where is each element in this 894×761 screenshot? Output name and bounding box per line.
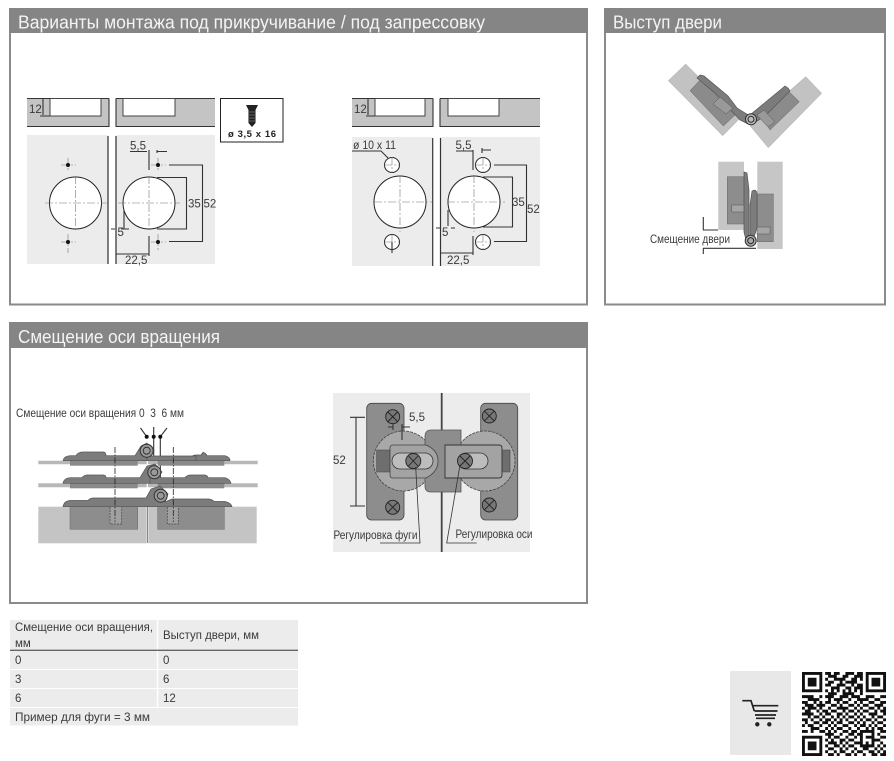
table: axis offset vs door protrusion: 0 xyxy=(163,655,169,667)
middle hinge position xyxy=(38,464,258,488)
diagram: screw-on variant: 12 xyxy=(29,104,42,116)
icon: screw size box xyxy=(220,98,283,142)
table: axis offset vs door protrusion: 12 xyxy=(163,693,176,705)
table: axis offset vs door protrusion: 3 xyxy=(15,674,21,686)
diagram: press-in variant: 52 xyxy=(527,204,540,216)
table: axis offset vs door protrusion: 6 xyxy=(15,693,21,705)
heading: mounting variants xyxy=(9,8,588,33)
diagram: hinge closed: Смещение двери xyxy=(650,234,730,246)
table: axis offset vs door protrusion: мм xyxy=(15,638,31,650)
diagram: screw-on variant: 5 xyxy=(118,227,124,239)
diagram: press-in variant: 5 xyxy=(442,227,448,239)
QR code xyxy=(802,672,886,756)
diagram: press-in variant: 5,5 xyxy=(456,140,472,152)
table: axis offset vs door protrusion: Смещение оси вращения, xyxy=(15,622,153,634)
diagram: hinge top view xyxy=(333,393,532,552)
diagram: screw-on variant: 52 xyxy=(204,198,216,210)
diagram: hinge top view: Регулировка фуги xyxy=(334,530,418,542)
heading: mounting variants: Варианты монтажа под прикручивание / под запрессовку xyxy=(18,12,485,32)
diagram: press-in variant: 35 xyxy=(512,197,525,209)
diagram: press-in variant: 12 xyxy=(354,104,367,116)
table: axis offset vs door protrusion: 6 xyxy=(163,674,169,686)
icon: shopping cart xyxy=(730,671,791,755)
diagram: hinge top view: Регулировка оси xyxy=(456,529,532,541)
heading: door protrusion: Выступ двери xyxy=(613,12,722,32)
diagram: screw-on variant: 22,5 xyxy=(125,255,147,267)
diagram: screw-on variant xyxy=(27,98,216,267)
icon: screw group xyxy=(386,409,496,514)
bottom hinge position with doors xyxy=(38,486,257,543)
diagram: hinge open xyxy=(668,64,822,148)
table: axis offset vs door protrusion xyxy=(10,620,298,726)
diagram: press-in variant xyxy=(352,98,540,267)
panel: door protrusion xyxy=(604,8,886,304)
panel: mounting variants xyxy=(9,8,588,304)
heading: axis offset xyxy=(9,322,588,348)
diagram: press-in variant: ø 10 x 11 xyxy=(353,140,396,152)
table: axis offset vs door protrusion: Выступ двери, мм xyxy=(163,630,259,642)
diagram: axis offset positions: Смещение оси вращения 0 3 6 мм xyxy=(16,408,184,420)
diagram: hinge top view: 5,5 xyxy=(409,412,425,424)
diagram: hinge top view: 52 xyxy=(333,455,346,467)
icon: screw size box: ø 3,5 x 16 xyxy=(228,129,276,140)
heading: door protrusion xyxy=(604,8,886,33)
diagram: screw-on variant: 5,5 xyxy=(130,140,146,152)
diagram: hinge closed xyxy=(650,162,783,254)
diagram: press-in variant: 22,5 xyxy=(447,255,469,267)
heading: axis offset: Смещение оси вращения xyxy=(18,327,220,347)
diagram: screw-on variant: 35 xyxy=(188,198,201,210)
top hinge position xyxy=(38,443,258,466)
table: axis offset vs door protrusion: 0 xyxy=(15,655,21,667)
panel: axis offset xyxy=(9,322,588,603)
diagram: axis offset positions xyxy=(16,408,258,543)
table: axis offset vs door protrusion: Пример для фуги = 3 мм xyxy=(15,712,150,724)
